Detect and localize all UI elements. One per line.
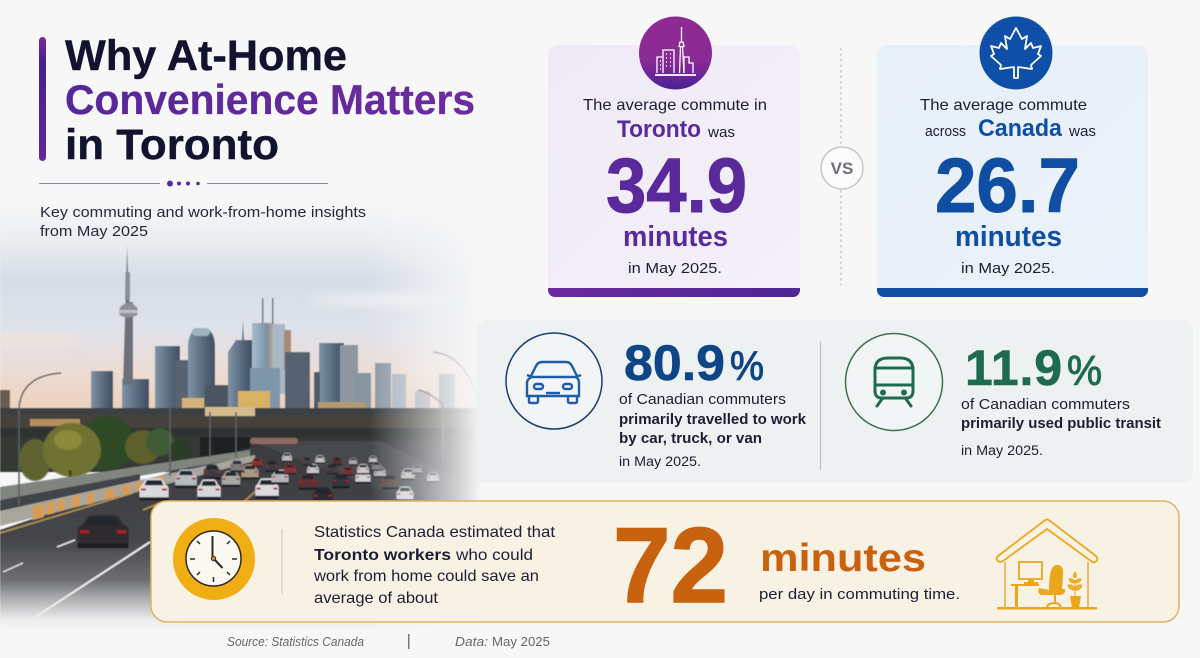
was: was	[707, 124, 735, 141]
footer: source: Source: Statistics Canada	[227, 634, 364, 649]
lamp posts	[19, 352, 478, 505]
stat: 26.7: 26.7	[935, 143, 1080, 229]
transit copy: in May 2025.	[961, 443, 1043, 458]
stat: 72: 72	[613, 505, 728, 625]
transit copy: primarily used public transit	[961, 416, 1161, 432]
footer: source: May 2025	[492, 634, 550, 649]
icon: maple leaf	[980, 16, 1052, 90]
trees	[19, 416, 190, 492]
date: in May 2025.	[961, 261, 1055, 277]
photo fades	[0, 190, 504, 658]
Canada highlight: Canada	[978, 115, 1063, 142]
minutes: minutes	[760, 537, 926, 580]
savings copy: Statistics Canada estimated that	[314, 524, 556, 541]
stat: 34.9: 34.9	[606, 143, 747, 229]
subtitle: from May 2025	[40, 223, 148, 240]
savings copy: work from home could save an	[313, 568, 539, 585]
icon: car	[506, 333, 602, 429]
subtitle	[40, 204, 366, 240]
panel: mode of travel	[477, 320, 1193, 483]
minutes: minutes	[955, 221, 1062, 253]
title block	[39, 32, 475, 169]
transit copy	[961, 397, 1161, 458]
VS badge	[821, 48, 863, 285]
per day copy: per day in commuting time.	[759, 586, 960, 603]
car copy: by car, truck, or van	[619, 431, 762, 447]
stat: 11.9%: %	[1067, 347, 1102, 394]
title line 3: in Toronto	[65, 121, 279, 169]
traffic	[78, 438, 439, 548]
panel: Canada commute	[877, 16, 1148, 297]
guardrail and barrier	[0, 450, 255, 526]
skyline buildings	[0, 298, 455, 412]
subtitle: Key commuting and work-from-home insights	[40, 204, 366, 221]
icon: home office	[996, 520, 1097, 610]
photo: Toronto skyline and highway traffic	[0, 190, 504, 658]
transit copy: of Canadian commuters	[961, 397, 1130, 413]
car copy	[619, 392, 807, 469]
Canada card copy: The average commute	[920, 97, 1087, 114]
savings copy	[313, 524, 556, 607]
title accent bar	[39, 37, 46, 161]
car copy: primarily travelled to work	[619, 412, 807, 428]
title divider	[39, 180, 328, 186]
title line 1: Why At-Home	[65, 32, 347, 80]
icon: Toronto skyline	[639, 16, 712, 90]
footer: source	[227, 634, 550, 649]
across: across	[925, 123, 966, 140]
stat: 80.9%: %	[730, 343, 764, 389]
highway	[0, 440, 480, 632]
was: was	[1068, 123, 1096, 140]
Toronto highlight: Toronto	[617, 116, 701, 143]
Toronto card copy: The average commute in	[583, 97, 767, 114]
panel: Toronto commute	[548, 16, 800, 297]
VS badge: VS	[831, 159, 853, 178]
lane markings	[0, 491, 256, 533]
stat: 80.9%	[624, 335, 764, 391]
date: in May 2025.	[628, 261, 722, 277]
stat: 80.9%: 80.9	[624, 335, 725, 391]
car copy: in May 2025.	[619, 454, 701, 469]
panel: time saved	[151, 501, 1179, 625]
car copy: of Canadian commuters	[619, 392, 786, 408]
footer: source: Data:	[455, 634, 488, 649]
icon: clock	[173, 518, 255, 600]
CN Tower	[119, 245, 138, 385]
savings copy: Toronto workers	[314, 547, 451, 564]
icon: train	[846, 334, 942, 430]
title line 2: Convenience Matters	[65, 76, 475, 123]
stat: 11.9%: 11.9	[965, 340, 1062, 396]
savings copy: who could	[455, 547, 533, 564]
minutes: minutes	[623, 221, 728, 253]
savings copy: average of about	[314, 590, 439, 607]
overpass bridges	[0, 407, 480, 472]
